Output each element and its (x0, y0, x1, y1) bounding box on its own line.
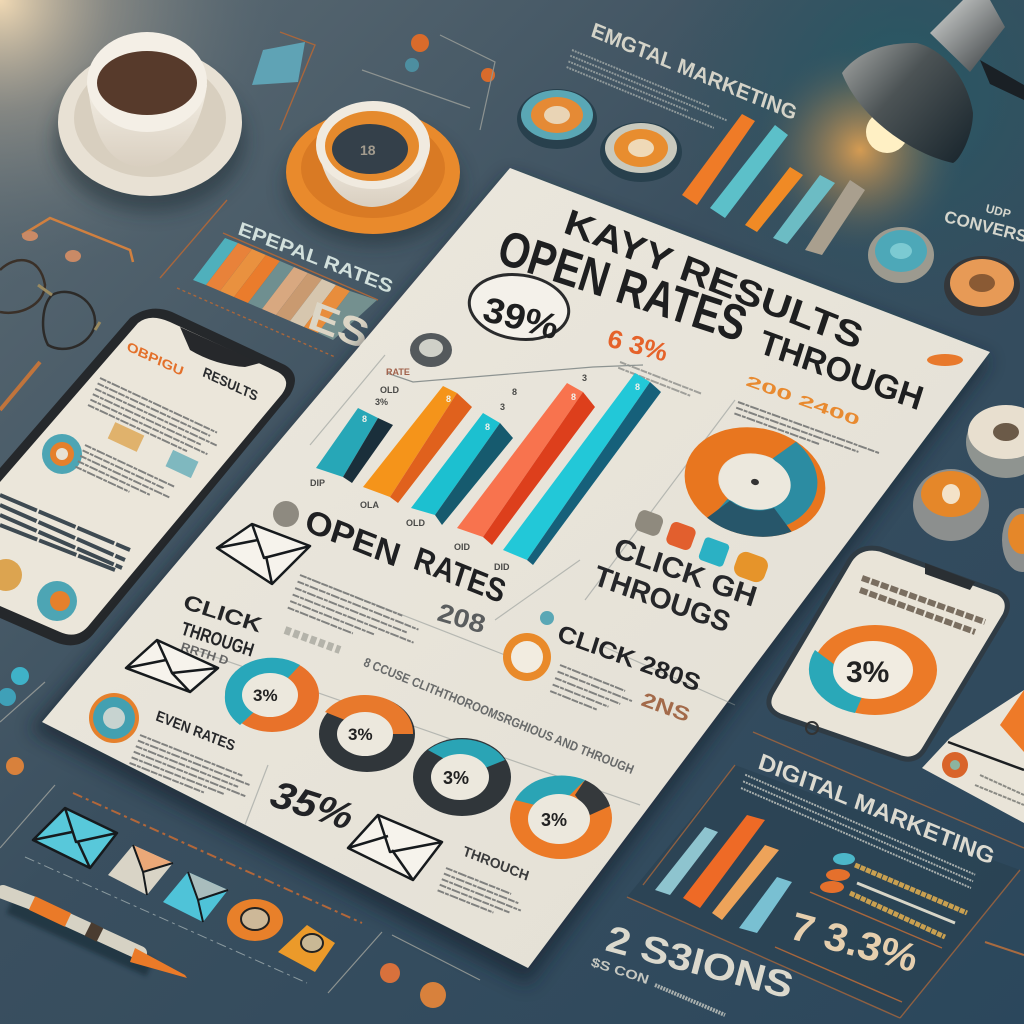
donut 1: 3% (253, 686, 278, 705)
stat: 35%: 35% (265, 773, 360, 839)
heading: conversions: UDP (984, 201, 1012, 221)
bar labels: 8 (362, 414, 367, 424)
bar labels: 8 (512, 387, 517, 397)
bar labels: DID (494, 562, 510, 572)
heading: open rates lower: RATES (410, 539, 510, 610)
desk lamp (842, 0, 1024, 163)
callout: percent oval (465, 268, 573, 347)
bar chart (310, 367, 661, 572)
heading: click through left (179, 591, 265, 668)
donut 4: 3% (541, 810, 567, 830)
panel: digital marketing (589, 732, 1024, 1018)
donut 4 (510, 775, 612, 859)
donut 3 (413, 738, 511, 816)
heading: open rates lower: 208 (434, 599, 489, 639)
callout: percent oval: 39% (479, 290, 563, 347)
bar labels: 8 (485, 422, 490, 432)
envelopes row bottom left (25, 793, 362, 983)
panel: open rates mini chart (160, 200, 395, 358)
text block: click: 2NS (638, 689, 693, 727)
bar labels: 3% (375, 397, 388, 407)
main report paper (30, 168, 990, 985)
text block: click (550, 665, 693, 727)
bar labels: OLA (360, 500, 379, 510)
desk items bottom (328, 932, 1024, 1008)
left phone (0, 309, 295, 645)
bar labels: 8 (571, 392, 576, 402)
heading: through: THROUGH (755, 323, 928, 418)
medallions top (517, 89, 682, 182)
heading: open rates lower: OPEN (301, 501, 405, 574)
bar labels: 3 (500, 402, 505, 412)
phone donut: 3% (846, 656, 889, 689)
small color icons (633, 508, 770, 585)
icon: small medallion (410, 333, 452, 367)
heading: click through (590, 532, 761, 639)
right phone (769, 548, 1007, 759)
heading: click: CLICK 280S (554, 620, 704, 697)
orange coffee cup: 18 (360, 142, 376, 158)
sticky note icon top (252, 32, 495, 130)
detail text: through (734, 373, 879, 464)
heading: throuch: THROUCH (461, 843, 531, 884)
heading: click through left: THROUGH (179, 618, 257, 661)
phone heading (125, 339, 260, 404)
icon: medallion orange (503, 611, 554, 681)
small desk items left (0, 667, 55, 848)
bar labels: RATE (386, 367, 410, 377)
bar labels: OLD (406, 518, 425, 528)
donut 2 (319, 695, 415, 772)
panel: open rates mini chart: EPEPAL RATES (235, 219, 395, 298)
text block: even rates (130, 735, 252, 807)
donut 1 (225, 658, 319, 732)
glasses (0, 218, 133, 410)
heading: digital marketing top: EMGTAL MARKETING (588, 19, 800, 125)
panel legend (775, 853, 967, 1002)
bar labels: DIP (310, 478, 325, 488)
heading: open rates lower (301, 501, 510, 639)
donut 2: 3% (348, 725, 373, 744)
panel sessions: 2 S3IONS (602, 917, 798, 1006)
panel sessions caption (589, 954, 725, 1015)
pen (3, 892, 187, 978)
panel stat: 7 3.3% (786, 904, 923, 981)
bar labels: 3 (582, 373, 587, 383)
coffee cup (55, 32, 245, 212)
bar labels: OLD (380, 385, 399, 395)
bar labels: 8 (635, 382, 640, 392)
heading: click through left: RRTH D (179, 639, 231, 668)
heading: open rates: OPEN RATES (492, 219, 754, 352)
panel heading: DIGITAL MARKETING (755, 748, 998, 870)
icon: envelope lower (348, 815, 442, 880)
heading: click through left: CLICK (180, 591, 265, 637)
phone donut (809, 625, 937, 715)
bar labels: 8 (446, 394, 451, 404)
text block: throuch (438, 868, 525, 922)
bar chart top right (682, 114, 865, 255)
icon: envelope (126, 640, 218, 692)
icon: envelope open (217, 524, 310, 584)
icon: medallion left (89, 693, 139, 743)
heading: click through: CLICK GH (610, 532, 761, 614)
orange coffee cup (285, 101, 461, 245)
phone heading: RESULTS (201, 364, 260, 404)
bar labels: OID (454, 542, 471, 552)
donut chart large (694, 431, 816, 533)
panel bars (655, 815, 792, 933)
donut 3: 3% (443, 768, 469, 788)
caption row: 8 CCUSE CLITHTHOROOMSRGHIOUS AND THROUGH (362, 654, 636, 777)
caption row (285, 630, 636, 777)
envelope card bottom right (922, 690, 1024, 823)
bar labels (310, 367, 640, 572)
phone heading: OBPIGU (125, 339, 185, 379)
text block: open rates (288, 575, 421, 656)
medallions right (868, 227, 1024, 572)
heading: click through: THROUGS (590, 560, 734, 639)
title: KAYY RESULTS (559, 201, 868, 357)
trend line (387, 365, 643, 382)
icon: small circle (273, 501, 299, 527)
icon: tag (927, 354, 963, 366)
bar stripes (193, 238, 377, 340)
panel sessions caption: $S CON (589, 954, 651, 987)
heading: even rates: EVEN RATES (154, 708, 237, 755)
panel: open rates mini chart: ES (303, 294, 374, 358)
detail text: through: 200 2400 (744, 373, 862, 430)
stat: percent orange: 6 3% (604, 325, 671, 367)
